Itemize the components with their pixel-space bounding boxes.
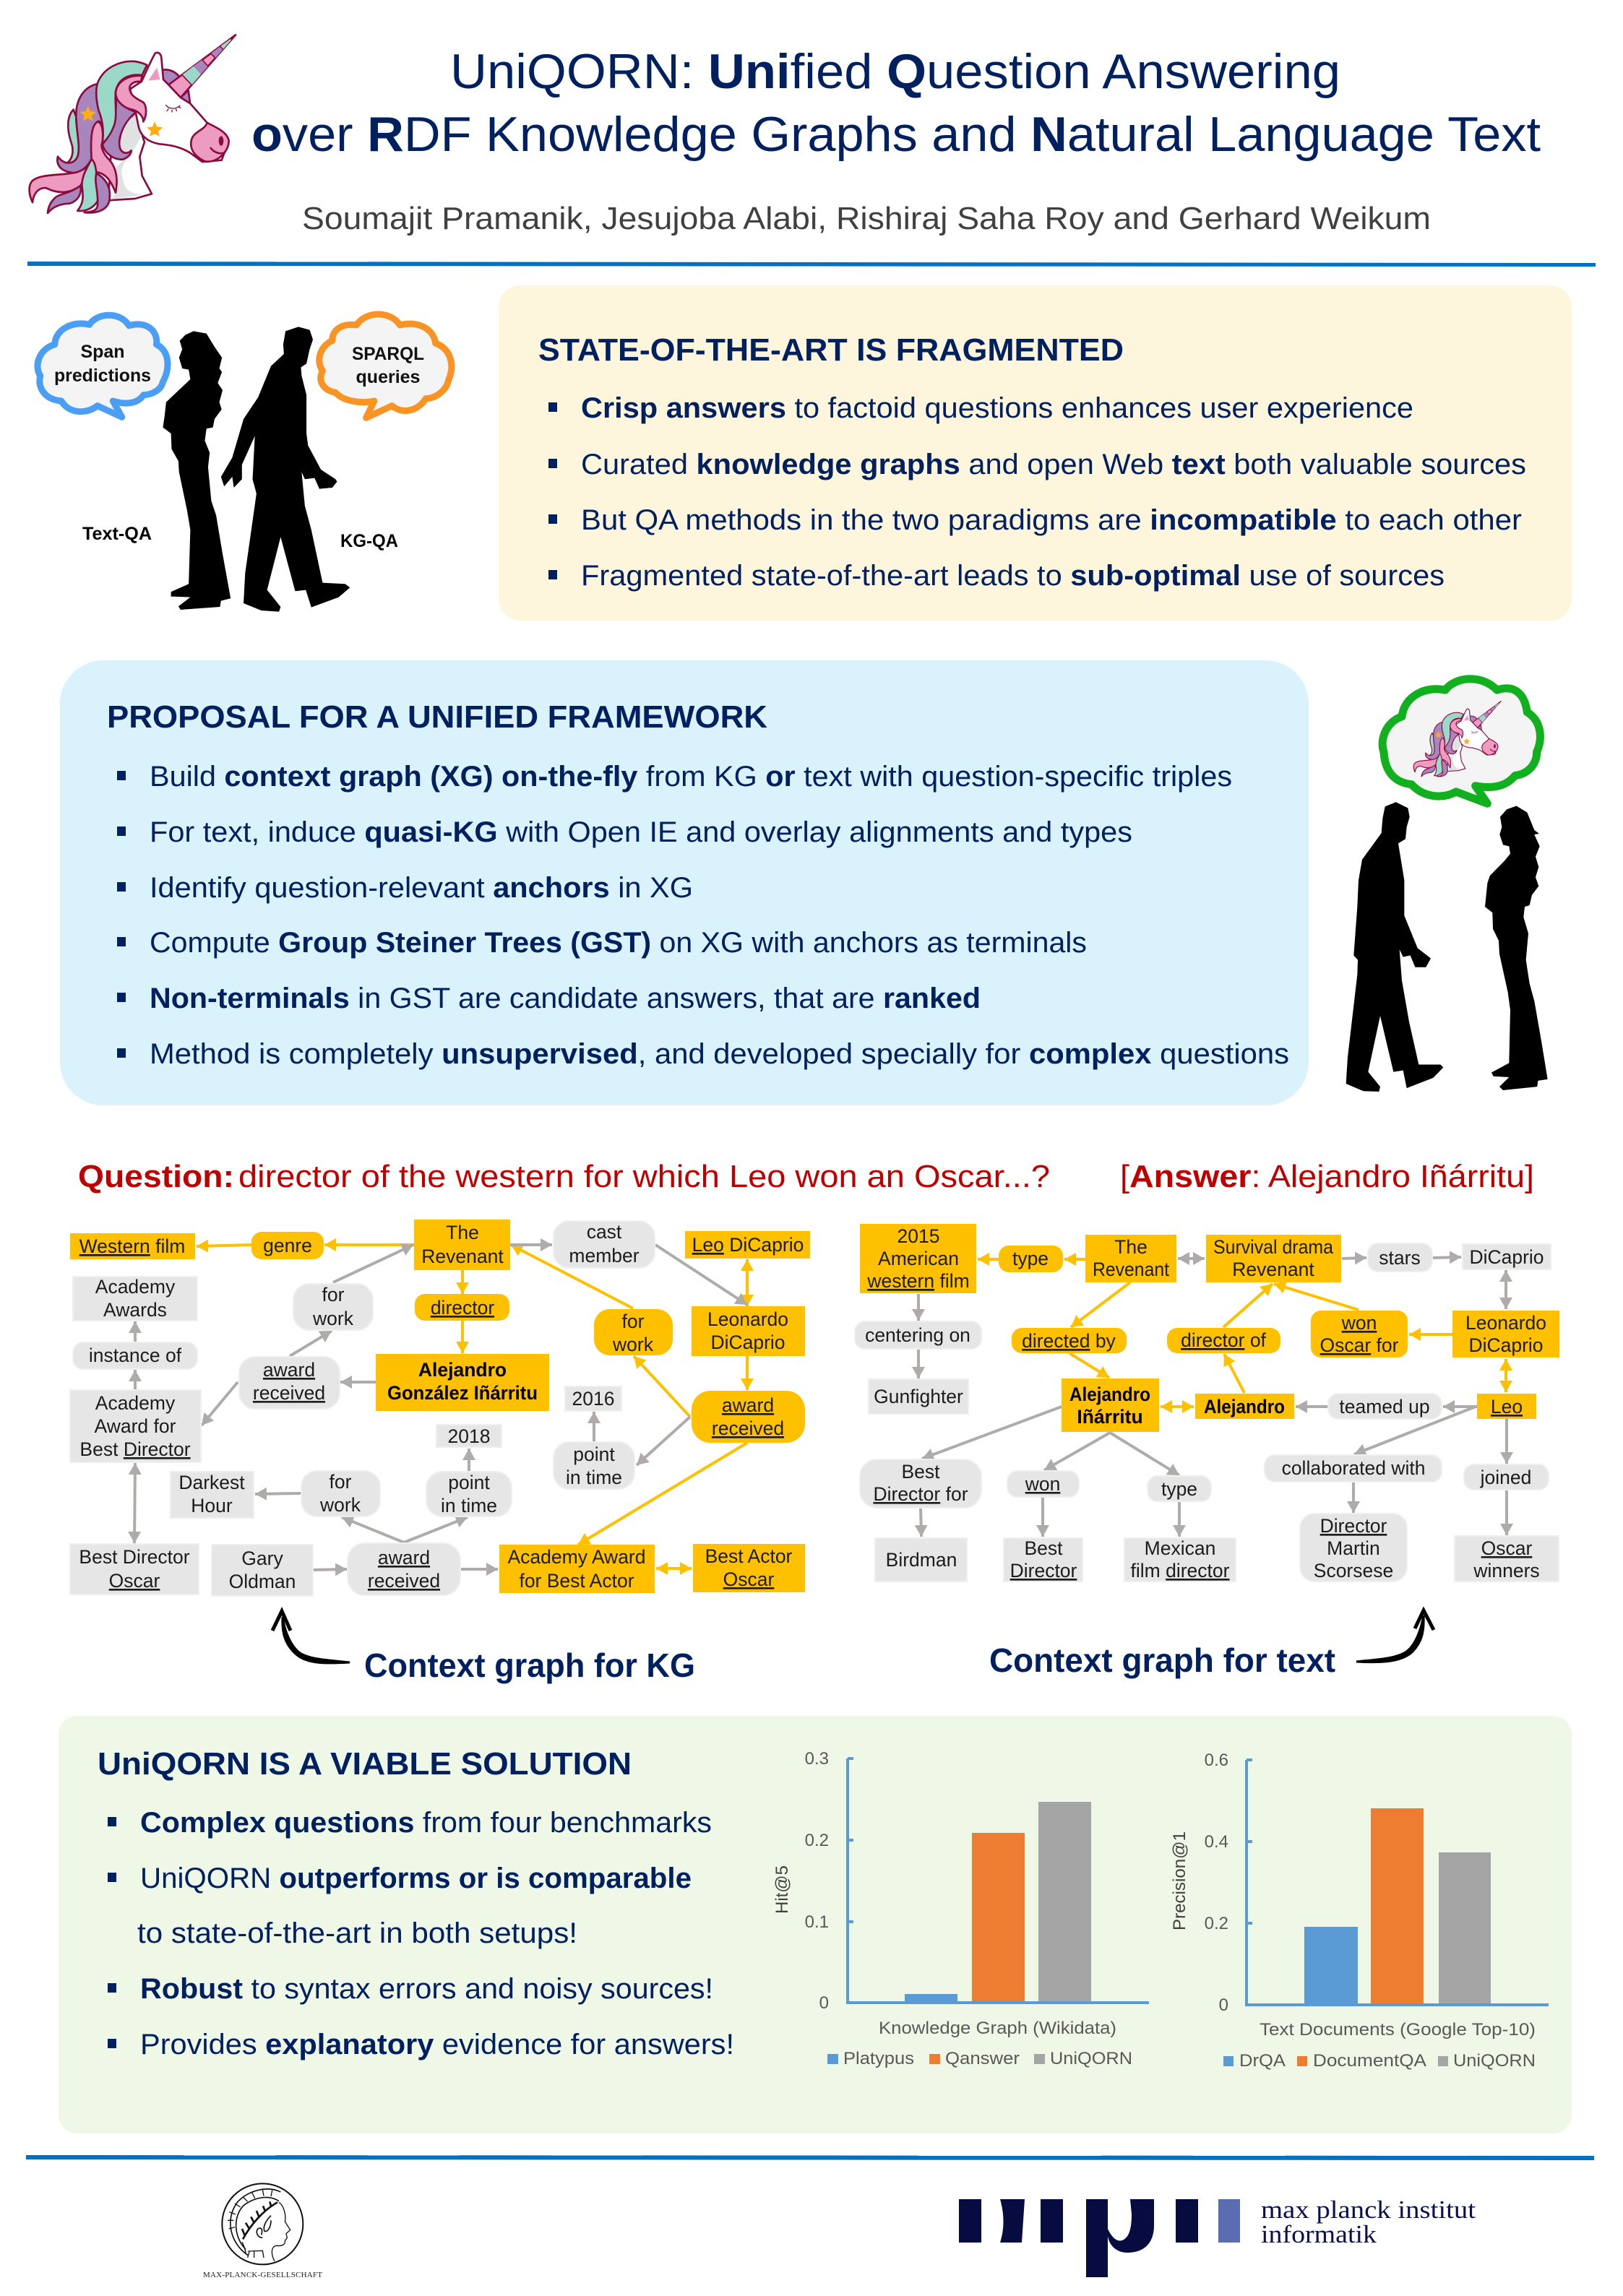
bar chart: knowledge graph: 0	[819, 1993, 829, 2013]
axis caption: knowledge graph: Knowledge Graph (Wikidata)	[879, 2019, 1116, 2038]
node: point in time lower: point	[448, 1472, 490, 1493]
node: academy award best director: Academy	[95, 1392, 176, 1414]
node: 2018: 2018	[448, 1425, 490, 1447]
arrow: cast to leonardo	[655, 1245, 747, 1305]
bar: Qanswer	[972, 1833, 1025, 2003]
label: span predictions	[54, 342, 151, 386]
node: award received grey	[239, 1357, 340, 1409]
arrow: point to 2018	[468, 1449, 470, 1471]
node: award received yellow: award	[722, 1394, 774, 1416]
node: alejandro gonzalez: González Iñárritu	[387, 1382, 538, 1404]
node: academy award best director	[70, 1390, 201, 1462]
logo: max planck institut informatik: max planck institut	[1261, 2196, 1476, 2224]
arrow: type to mexican	[1178, 1501, 1181, 1537]
bullet list: viable solution: Provides explanatory evidence for answers!	[140, 2029, 734, 2060]
node: won oscar for	[1311, 1311, 1408, 1358]
axis caption: text documents: Text Documents (Google Top-10)	[1260, 2020, 1536, 2040]
label: span predictions: predictions	[54, 366, 151, 386]
illustration: two silhouettes with differing speech bubbles	[38, 314, 452, 612]
arrow: revenant to survival	[1178, 1257, 1205, 1260]
question line: Question:	[78, 1159, 234, 1194]
bullet list: proposal	[117, 761, 1289, 1070]
node: academy award best actor	[499, 1545, 655, 1593]
node: director	[415, 1294, 509, 1321]
legend: text documents	[1223, 2051, 1536, 2071]
node: the revenant: The	[446, 1222, 479, 1243]
bullet list: state of the art: Crisp answers to factoid questions enhances user experience	[581, 392, 1413, 424]
node: director martin scorsese: Martin	[1327, 1537, 1380, 1559]
node: survival drama revenant: Revenant	[1232, 1259, 1314, 1280]
arrow: award to instance	[134, 1370, 137, 1389]
node: leonardo dicaprio text: Leonardo	[1465, 1312, 1546, 1334]
icon: orange speech bubble	[319, 314, 452, 418]
node: cast member: cast	[587, 1221, 622, 1243]
node: academy award best actor: Academy Award	[507, 1546, 646, 1568]
node: point in time lower: in time	[441, 1495, 497, 1516]
node: leo dicaprio: Leo DiCaprio	[692, 1234, 804, 1256]
legend: knowledge graph: Platypus	[843, 2049, 914, 2068]
node: alejandro: Alejandro	[1204, 1396, 1285, 1417]
node: instance of	[73, 1342, 197, 1369]
axis title: Precision@1: Precision@1	[1170, 1831, 1189, 1930]
node: mexican film director: Mexican	[1145, 1537, 1215, 1559]
node: director martin scorsese	[1300, 1514, 1407, 1581]
node: won	[1007, 1471, 1079, 1497]
legend: text documents: DocumentQA	[1313, 2051, 1426, 2071]
node: gary oldman	[212, 1545, 313, 1596]
node: survival drama revenant: Survival drama	[1213, 1236, 1333, 1258]
node: the revenant	[414, 1220, 510, 1270]
arrow: leo to joined	[1505, 1419, 1508, 1464]
arrow: curved arrow to text graph	[1356, 1610, 1434, 1662]
node: for work grey: work	[312, 1308, 354, 1329]
bullet list: proposal: Compute Group Steiner Trees (GST) on XG with anchors as terminals	[150, 927, 1087, 959]
node: best actor oscar: Oscar	[723, 1568, 775, 1590]
node: academy award best director: Best Director	[79, 1438, 191, 1460]
node: academy award best actor: for Best Actor	[519, 1570, 634, 1592]
node: point in time right: point	[573, 1443, 615, 1465]
node: type yellow	[999, 1246, 1063, 1272]
arrow: award to academy actor	[460, 1568, 498, 1571]
node: won oscar for: won	[1341, 1312, 1377, 1334]
caption: context graph for KG: Context graph for KG	[364, 1647, 695, 1684]
node: leo: Leo	[1491, 1396, 1523, 1417]
node: gary oldman: Oldman	[229, 1571, 296, 1592]
node: best director oscar: Best Director	[79, 1546, 190, 1568]
icon: woman silhouette	[163, 331, 231, 610]
label: sparql queries: SPARQL	[352, 344, 424, 364]
node: director of: director of	[1181, 1329, 1267, 1351]
arrow: best actor link	[656, 1567, 692, 1570]
node: point in time lower	[426, 1472, 512, 1516]
arrow: collaborated to scorsese	[1352, 1482, 1355, 1513]
chart: context graph for text	[855, 1224, 1559, 1581]
node: survival drama revenant	[1206, 1235, 1341, 1282]
title	[251, 44, 1541, 162]
node: best director: Best	[1024, 1537, 1063, 1559]
node: type grey	[1148, 1476, 1211, 1501]
node: 2015 american western film: western film	[866, 1270, 970, 1292]
bar chart: knowledge graph: 0.2	[805, 1831, 829, 1850]
bullet list: viable solution: Robust to syntax errors and noisy sources!	[140, 1973, 713, 2005]
legend: text documents: UniQORN	[1453, 2051, 1536, 2071]
bullet list: state of the art: Fragmented state-of-the-art leads to sub-optimal use of sources	[581, 560, 1445, 592]
arrow: for work to darkest hour	[255, 1493, 301, 1494]
bar: DrQA	[1304, 1927, 1358, 2005]
label: KG-QA: KG-QA	[340, 531, 398, 551]
illustration: two silhouettes sharing a unicorn thought	[1346, 679, 1548, 1092]
title: over RDF Knowledge Graphs and Natural Language Text	[251, 107, 1541, 162]
node: gary oldman: Gary	[241, 1548, 283, 1569]
node: birdman	[875, 1538, 967, 1581]
bar chart: knowledge graph: 0.3	[805, 1749, 829, 1769]
node: leonardo dicaprio: Leonardo	[707, 1308, 788, 1330]
node: academy awards: Academy	[95, 1276, 176, 1298]
arrow: instance to awards	[134, 1321, 137, 1342]
arrow: centering to gunfighter	[917, 1349, 920, 1378]
node: stars: stars	[1379, 1247, 1421, 1269]
bar chart: text documents: 0	[1219, 1995, 1228, 2015]
arrow: for work to revenant	[511, 1245, 633, 1308]
node: alejandro gonzalez	[376, 1354, 549, 1411]
heading: state of the art: STATE-OF-THE-ART IS FRAGMENTED	[538, 332, 1124, 368]
node: alejandro inarritu: Iñárritu	[1077, 1406, 1143, 1428]
legend: knowledge graph: Qanswer	[945, 2049, 1020, 2068]
node: leo	[1477, 1394, 1536, 1419]
node: best director oscar: Oscar	[109, 1570, 160, 1592]
node: cast member	[554, 1221, 655, 1268]
arrow: award to point	[637, 1417, 690, 1465]
arrow: joined to oscar winners	[1505, 1490, 1508, 1535]
node: joined	[1464, 1464, 1549, 1490]
node: mexican film director	[1124, 1537, 1236, 1581]
icon: unicorn logo	[30, 35, 236, 213]
node: point in time right: in time	[566, 1467, 622, 1488]
node: teamed up	[1328, 1394, 1442, 1419]
node: 2015 american western film: American	[878, 1248, 959, 1269]
icon: man silhouette right	[1346, 802, 1443, 1092]
legend: knowledge graph: UniQORN	[1050, 2049, 1132, 2068]
arrow: for work to revenant grey	[333, 1245, 413, 1282]
node: best director for	[860, 1459, 981, 1508]
node: best director for: Director for	[873, 1483, 968, 1505]
node: director martin scorsese: Director	[1320, 1515, 1387, 1537]
node: oscar winners	[1455, 1536, 1559, 1581]
logo: max planck institut informatik	[959, 2196, 1476, 2277]
panel: proposal	[60, 660, 1309, 1105]
heading: viable solution: UniQORN IS A VIABLE SOLUTION	[98, 1746, 632, 1782]
node: for work lower: work	[319, 1494, 361, 1516]
arrow: revenant to type	[1064, 1258, 1085, 1261]
arrow: won oscar to survival	[1274, 1284, 1359, 1310]
arrow: type to film	[978, 1258, 999, 1261]
label: Text-QA: Text-QA	[82, 524, 152, 544]
authors: Soumajit Pramanik, Jesujoba Alabi, Rishiraj Saha Roy and Gerhard Weikum	[302, 201, 1431, 236]
bullet list: proposal: Identify question-relevant anchors in XG	[150, 872, 693, 904]
bar chart: knowledge graph: 0.1	[805, 1912, 829, 1932]
node: director martin scorsese: Scorsese	[1314, 1560, 1393, 1581]
node: the revenant text	[1085, 1235, 1176, 1282]
node: the revenant text: The	[1114, 1236, 1148, 1258]
node: point in time right	[554, 1442, 634, 1489]
icon: man silhouette	[221, 327, 350, 612]
node: academy award best director: Award for	[95, 1415, 176, 1437]
node: directed by	[1012, 1328, 1127, 1353]
arrow: leonardo to leo	[1504, 1359, 1507, 1392]
bar chart: knowledge graph	[772, 1749, 1149, 2068]
node: mexican film director: film director	[1131, 1560, 1230, 1581]
node: for work lower: for	[330, 1471, 352, 1493]
arrow: revenant to cast	[510, 1243, 552, 1246]
heading: proposal: PROPOSAL FOR A UNIFIED FRAMEWORK	[107, 699, 767, 735]
node: award received lower	[348, 1543, 460, 1595]
node: for work yellow: work	[612, 1334, 654, 1355]
arrow: alejandro to award	[340, 1381, 376, 1384]
node: for work yellow: for	[622, 1311, 645, 1332]
bullet list: proposal: Method is completely unsupervised , and developed specially for complex questions	[150, 1038, 1289, 1070]
arrow: award to best director award	[202, 1382, 238, 1425]
arrow: director of to survival	[1223, 1284, 1273, 1327]
arrow: survival to stars	[1342, 1258, 1366, 1259]
bullet list: state of the art: But QA methods in the two paradigms are incompatible to each other	[581, 504, 1522, 536]
node: best director oscar	[70, 1544, 199, 1594]
arrow: leonardo to won oscar	[1409, 1333, 1452, 1336]
node: director: director	[431, 1297, 494, 1319]
bullet list: viable solution: UniQORN outperforms or is comparable	[140, 1863, 692, 1894]
node: western film: Western film	[79, 1235, 185, 1257]
node: darkest hour: Hour	[191, 1495, 233, 1516]
logo: max planck institut informatik: informatik	[1261, 2220, 1377, 2248]
arrow: alejandro to type	[1110, 1433, 1179, 1475]
bar chart: text documents: 0.4	[1205, 1832, 1228, 1852]
node: academy awards: Awards	[103, 1299, 167, 1321]
bar: DocumentQA	[1371, 1808, 1424, 2005]
node: centering on	[855, 1321, 981, 1349]
node: birdman: Birdman	[886, 1549, 957, 1571]
node: instance of: instance of	[89, 1345, 182, 1366]
arrow: alejandro link	[1161, 1405, 1194, 1408]
arrow: point to 2016	[593, 1412, 595, 1441]
arrow: revenant to directed by	[1071, 1282, 1130, 1327]
node: award received grey: award	[263, 1359, 315, 1381]
bullet list: viable solution: to state-of-the-art in both setups!	[137, 1917, 577, 1949]
node: gunfighter: Gunfighter	[874, 1386, 963, 1407]
bar: UniQORN KG	[1038, 1802, 1091, 2003]
question line: director of the western for which Leo won an Oscar...?	[238, 1159, 1050, 1194]
caption: context graph for text: Context graph for text	[989, 1641, 1335, 1679]
node: oscar winners: winners	[1473, 1560, 1540, 1581]
node: best director for: Best	[901, 1461, 940, 1483]
node: won: won	[1025, 1473, 1060, 1495]
node: directed by: directed by	[1022, 1330, 1116, 1352]
arrow: revenant to genre	[324, 1243, 414, 1246]
node: best actor oscar: Best Actor	[705, 1545, 793, 1567]
node: joined: joined	[1480, 1467, 1531, 1488]
title: UniQORN: Unified Question Answering	[450, 44, 1340, 99]
bar chart: text documents	[1170, 1751, 1549, 2071]
node: award received grey: received	[253, 1382, 325, 1404]
bar chart: text documents: 0.2	[1205, 1914, 1228, 1933]
node: genre: genre	[263, 1235, 312, 1256]
arrow: teamed to alejandro	[1296, 1405, 1328, 1408]
node: teamed up: teamed up	[1339, 1396, 1430, 1417]
node: leonardo dicaprio text: DiCaprio	[1468, 1334, 1544, 1356]
node: oscar winners: Oscar	[1481, 1537, 1533, 1559]
bullet list: proposal: For text, induce quasi-KG with Open IE and overlay alignments and types	[150, 816, 1132, 848]
node: darkest hour: Darkest	[178, 1472, 245, 1493]
node: stars	[1368, 1243, 1432, 1272]
label: sparql queries	[352, 344, 424, 387]
node: won oscar for: Oscar for	[1320, 1334, 1399, 1356]
node: darkest hour	[171, 1472, 254, 1518]
node: genre	[251, 1232, 324, 1259]
node: alejandro inarritu	[1062, 1378, 1159, 1432]
arrow: award to for work lower	[342, 1517, 404, 1542]
node: the revenant text: Revenant	[1093, 1259, 1170, 1280]
icon: small unicorn	[1413, 702, 1501, 777]
answer line: [Answer: Alejandro Iñárritu]	[1120, 1159, 1534, 1194]
node: academy awards	[73, 1276, 197, 1321]
node: alejandro gonzalez: Alejandro	[418, 1359, 507, 1381]
icon: blue speech bubble	[38, 315, 168, 417]
bullet list: viable solution	[108, 1807, 734, 2060]
node: award received lower: received	[368, 1570, 440, 1592]
node: collaborated with	[1265, 1455, 1442, 1482]
node: best director	[1004, 1537, 1082, 1581]
node: for work yellow	[594, 1309, 673, 1355]
arrow: film to centering	[917, 1294, 920, 1321]
legend: text documents: DrQA	[1239, 2051, 1286, 2071]
axis title: Hit@5: Hit@5	[772, 1865, 792, 1914]
node: best actor oscar	[693, 1544, 805, 1592]
arrow: leo to teamed	[1443, 1405, 1477, 1408]
node: award received lower: award	[378, 1547, 430, 1568]
label: span predictions: Span	[80, 342, 125, 362]
node: gunfighter	[869, 1379, 968, 1414]
arrow: stars to dicaprio	[1433, 1257, 1461, 1258]
node: director of	[1167, 1328, 1280, 1353]
node: best director: Director	[1010, 1560, 1077, 1581]
node: collaborated with: collaborated with	[1282, 1457, 1425, 1479]
node: 2016: 2016	[572, 1388, 614, 1410]
node: 2016	[565, 1386, 621, 1411]
arrow: leo to collaborated	[1354, 1407, 1476, 1454]
chart: context graph for KG	[70, 1220, 810, 1596]
node: 2015 american western film	[860, 1224, 976, 1293]
bullet list: viable solution: Complex questions from four benchmarks	[140, 1807, 712, 1839]
arrow: leo to leonardo	[746, 1259, 749, 1306]
node: 2015 american western film: 2015	[897, 1225, 939, 1247]
arrow: won to best director	[1041, 1497, 1044, 1537]
bullet list: state of the art: Curated knowledge graphs and open Web text both valuable sources	[581, 449, 1526, 480]
bullet list: state of the art	[548, 392, 1526, 592]
logo: max planck gesellschaft: MAX-PLANCK-GESELLSCHAFT	[203, 2271, 322, 2279]
node: type grey: type	[1161, 1478, 1197, 1500]
arrow: award to point lower	[404, 1517, 468, 1542]
node: cast member: member	[569, 1245, 640, 1266]
arrow: award to oscar	[134, 1463, 135, 1543]
node: 2018	[436, 1425, 501, 1447]
bullet list: proposal: Build context graph (XG) on-the-fly from KG or text with question-specific triples	[150, 761, 1232, 793]
arrow: award to for work grey	[290, 1331, 332, 1356]
node: for work grey: for	[322, 1284, 345, 1305]
arrow: leonardo to award	[746, 1356, 749, 1390]
arrow: alejandro to best director for	[922, 1407, 1062, 1459]
arrow: revenant to director	[461, 1270, 464, 1294]
node: the revenant: Revenant	[421, 1246, 504, 1267]
node: for work lower	[301, 1471, 380, 1516]
arrow: gary to award	[313, 1569, 347, 1570]
node: dicaprio: DiCaprio	[1469, 1246, 1544, 1268]
node: leonardo dicaprio	[692, 1306, 805, 1356]
arrow: curved arrow to KG graph	[272, 1611, 350, 1663]
arrow: dicaprio to leonardo	[1504, 1270, 1507, 1309]
bar chart: text documents: 0.6	[1205, 1751, 1228, 1770]
bar: Platypus	[905, 1994, 957, 2003]
bar: UniQORN text	[1439, 1852, 1491, 2005]
label: sparql queries: queries	[356, 367, 420, 387]
node: for work grey	[293, 1284, 373, 1330]
icon: woman silhouette right	[1485, 806, 1548, 1090]
node: award received yellow: received	[712, 1417, 784, 1439]
icon: green thought bubble	[1382, 679, 1540, 803]
node: alejandro inarritu: Alejandro	[1069, 1384, 1150, 1405]
arrow: award to academy award	[578, 1443, 747, 1545]
panel: viable solution	[59, 1716, 1572, 2133]
node: award received yellow	[692, 1391, 805, 1443]
node: type yellow: type	[1012, 1248, 1049, 1269]
arrow: director to alejandro	[461, 1321, 464, 1353]
node: centering on: centering on	[865, 1324, 970, 1346]
bullet list: proposal: Non-terminals in GST are candidate answers, that are ranked	[150, 983, 981, 1014]
arrow: alejandro to director of	[1224, 1354, 1244, 1393]
arrow: directed by to alejandro	[1069, 1353, 1109, 1378]
logo: max planck gesellschaft	[203, 2183, 322, 2279]
arrow: genre to western	[197, 1245, 251, 1246]
node: leonardo dicaprio: DiCaprio	[710, 1332, 785, 1353]
panel: state of the art	[499, 285, 1572, 621]
legend: knowledge graph	[827, 2049, 1132, 2068]
arrow: alejandro to won	[1044, 1433, 1110, 1470]
node: leonardo dicaprio text	[1452, 1311, 1559, 1358]
arrow: award to for work	[634, 1356, 690, 1417]
